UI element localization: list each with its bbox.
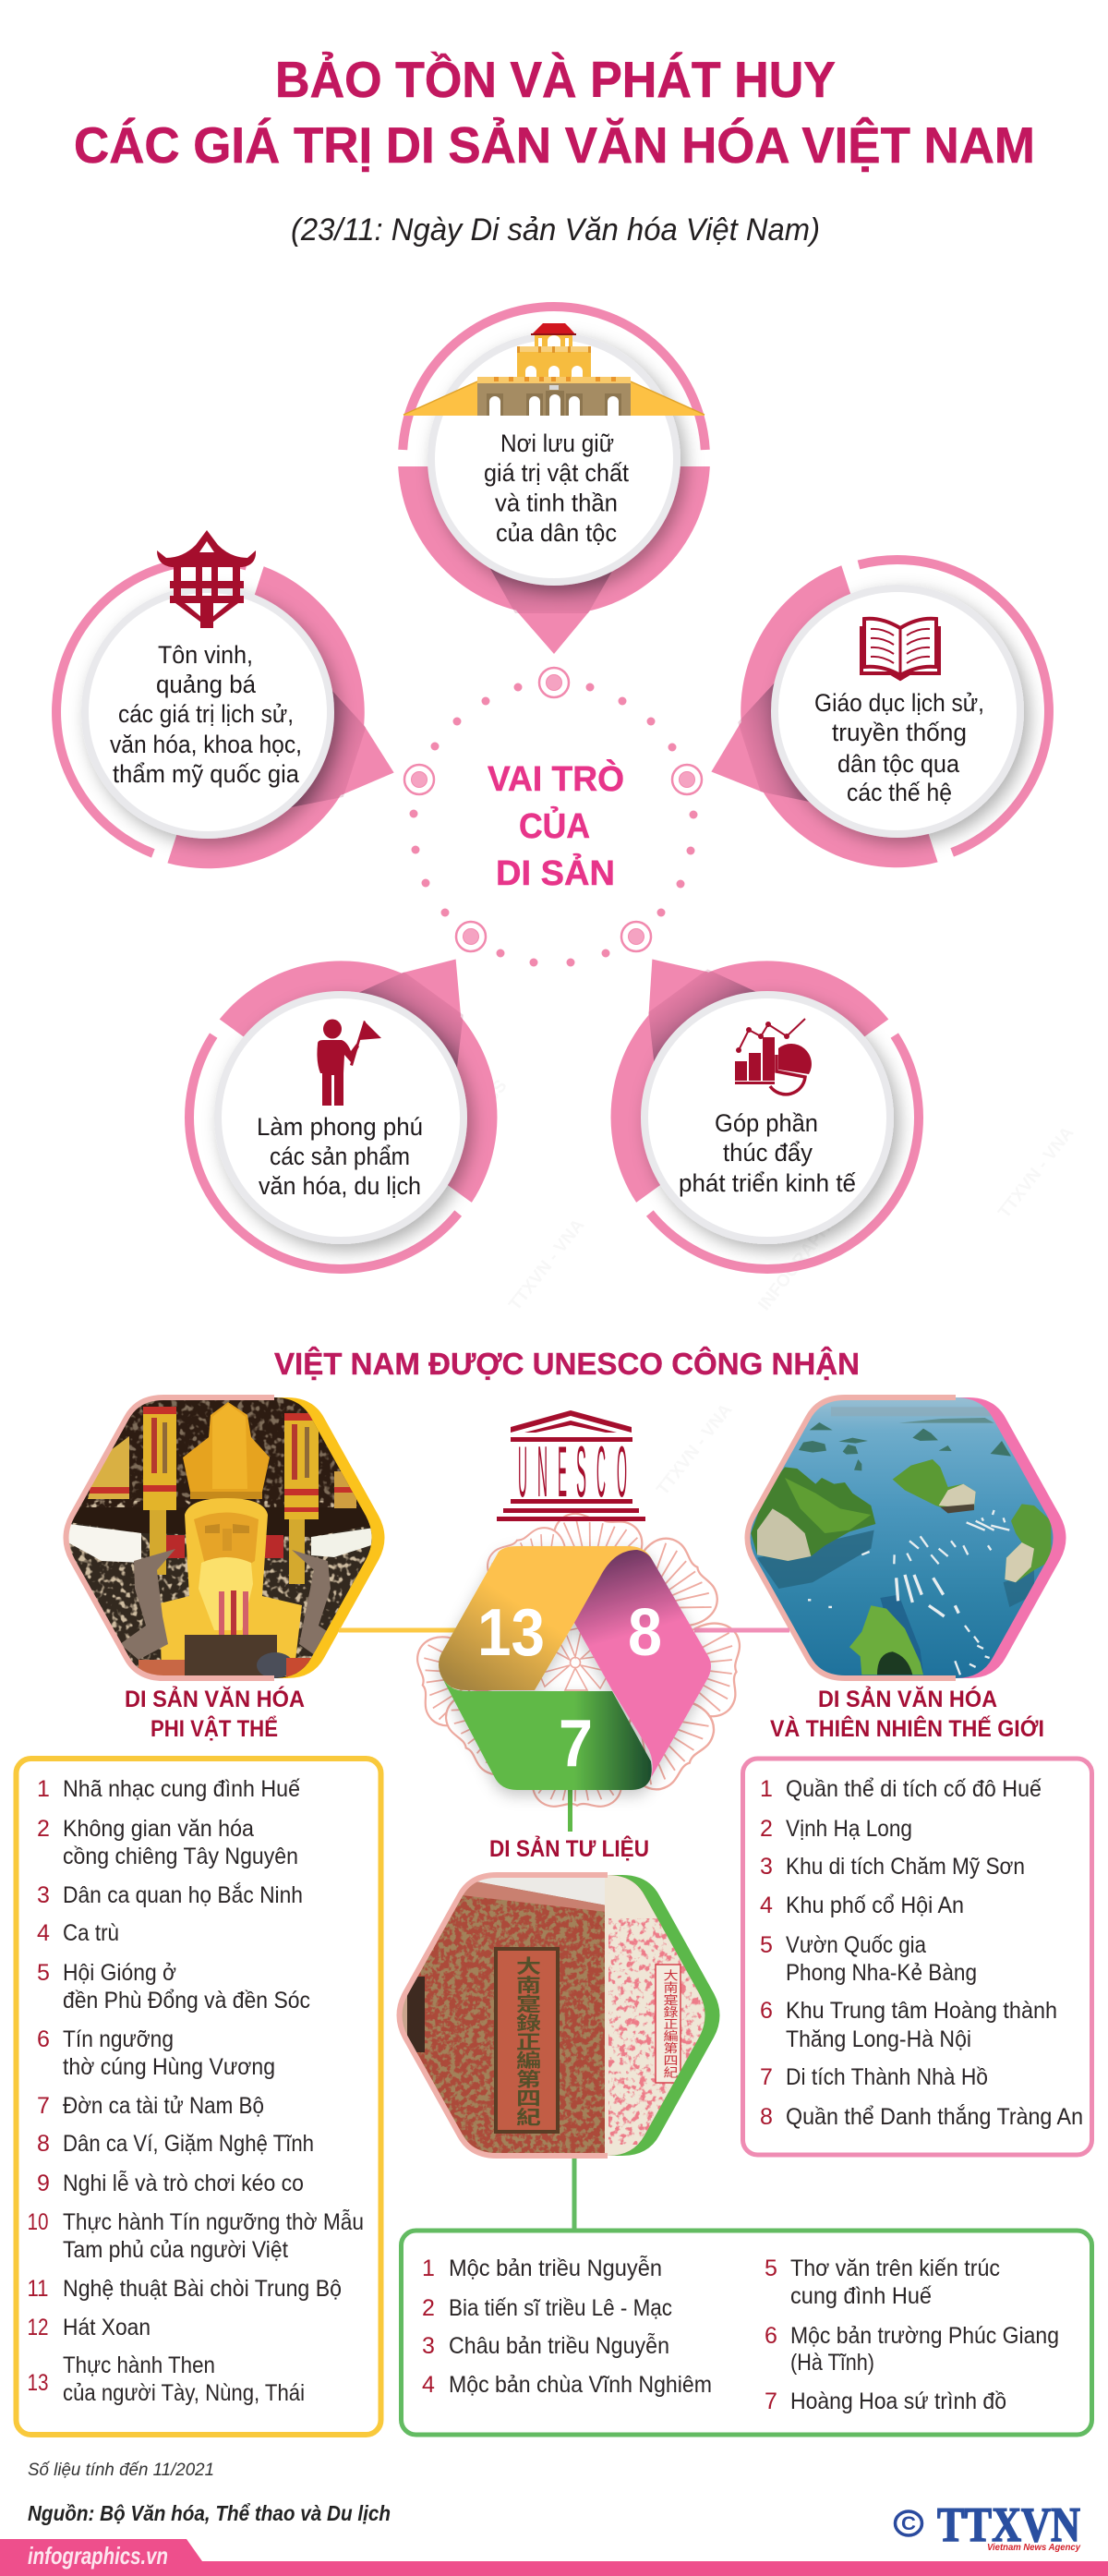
connector: green upper [568, 1783, 572, 1832]
icon: person with flag [317, 1020, 381, 1106]
text: role 2: văn hóa, khoa học, [110, 731, 302, 758]
text: TTXVN - VNA [505, 1215, 589, 1314]
panel: world heritage list: Quần thể Danh thắng Tràng An [786, 2103, 1083, 2130]
panel: intangible heritage list: của người Tày, Nùng, Thái [63, 2380, 305, 2406]
text: role 2: thẩm mỹ quốc gia [113, 760, 300, 788]
label: documentary heritage: DI SẢN TƯ LIỆU [489, 1834, 649, 1862]
text: role 3: truyền thống [832, 719, 967, 746]
text: role 4: văn hóa, du lịch [259, 1172, 421, 1200]
panel: intangible heritage list: Dân ca quan họ Bắc Ninh [63, 1881, 303, 1908]
panel: world heritage list: Khu di tích Chăm Mỹ Sơn [786, 1854, 1025, 1880]
panel: intangible heritage list: Tín ngưỡng [63, 2026, 174, 2052]
photo: woodblock hexagon [392, 1870, 720, 2161]
panel: intangible heritage list: Không gian văn hóa [63, 1816, 254, 1842]
band: pink 8: 8 [628, 1596, 662, 1670]
band: green 7 [440, 1675, 652, 1790]
icon: UNESCO logo: N [537, 1431, 548, 1512]
panel: documentary heritage list: 2 [422, 2295, 435, 2321]
text: TTXVN - VNA [994, 1123, 1078, 1222]
panel: world heritage list: Vịnh Hạ Long [786, 1816, 912, 1842]
panel: world heritage list: Thăng Long-Hà Nội [786, 2026, 971, 2052]
panel: intangible heritage list: Thực hành Then [63, 2352, 215, 2378]
panel: world heritage list: Khu phố cổ Hội An [786, 1893, 964, 1918]
panel: documentary heritage list: Mộc bản triều Nguyễn [449, 2255, 662, 2281]
panel: documentary heritage list: (Hà Tĩnh) [790, 2350, 874, 2376]
panel: world heritage list: Khu Trung tâm Hoàng thành [786, 1998, 1057, 2024]
panel: intangible heritage list: 10 [28, 2209, 48, 2235]
title: CÁC GIÁ TRỊ DI SẢN VĂN HÓA VIỆT NAM [74, 116, 1035, 174]
icon: one pillar pagoda [157, 530, 256, 628]
panel: intangible heritage list: Dân ca Ví, Giặm Nghệ Tĩnh [63, 2131, 314, 2157]
panel: intangible heritage list: Tam phủ của người Việt [63, 2237, 288, 2263]
label: world heritage: DI SẢN VĂN HÓA [818, 1685, 997, 1712]
panel: intangible heritage list: 12 [28, 2315, 48, 2340]
centre heading: VAI TRÒ [488, 758, 624, 799]
panel: world heritage list: 4 [760, 1893, 773, 1918]
text: role 3 [814, 689, 984, 806]
panel: role 4 bottom-left circle [126, 867, 582, 1332]
panel: documentary heritage list: 7 [765, 2389, 777, 2414]
photo: woodblock hexagon: 大南寔錄正編第四紀 [661, 1969, 678, 2078]
panel: intangible heritage list: 9 [37, 2171, 50, 2196]
icon: UNESCO logo: U [518, 1431, 527, 1512]
logo: TTXVN [896, 2498, 1080, 2553]
centre heading: DI SẢN [496, 853, 615, 893]
panel: world heritage list: 3 [760, 1854, 773, 1880]
icon: UNESCO logo: S [576, 1431, 586, 1512]
band: yellow 13: 13 [477, 1596, 545, 1670]
panel: intangible heritage list: 1 [37, 1776, 50, 1802]
panel: intangible heritage list: 6 [37, 2026, 50, 2052]
label: intangible heritage [125, 1685, 305, 1742]
band: pink 8 [574, 1550, 711, 1778]
panel: documentary heritage list: cung đình Huế [790, 2283, 932, 2309]
panel: intangible heritage list: Nghi lễ và trò chơi kéo co [63, 2170, 304, 2196]
logo: TTXVN: TTXVN [937, 2498, 1080, 2552]
panel: documentary heritage list: Mộc bản trường Phúc Giang [790, 2323, 1059, 2349]
source: Nguồn: Bộ Văn hóa, Thể thao và Du lịch [28, 2501, 391, 2525]
text: role 2: các giá trị lịch sử, [118, 700, 294, 728]
dotted ring around centre [404, 668, 702, 966]
panel: intangible heritage list: Ca trù [63, 1920, 119, 1946]
panel: world heritage list: 8 [760, 2104, 773, 2130]
chart: three-part ribbon [439, 1546, 711, 1790]
panel: world heritage list: 6 [760, 1998, 773, 2024]
icon: chart growth [735, 1019, 812, 1094]
centre heading: CỦA [519, 805, 590, 846]
panel: world heritage list: 2 [760, 1816, 773, 1842]
text: INFOGRAPHICS [754, 1196, 853, 1314]
text: role 1: của dân tộc [496, 519, 617, 547]
title [74, 51, 1035, 174]
panel: world heritage list: Quần thể di tích cố đô Huế [786, 1776, 1042, 1802]
panel: intangible heritage list: 8 [37, 2131, 50, 2157]
text: role 5: Góp phần [715, 1109, 818, 1137]
panel: documentary heritage list: 5 [765, 2256, 777, 2281]
label: world heritage [770, 1685, 1044, 1742]
band: yellow 13 [439, 1546, 653, 1690]
text: role 3: các thế hệ [847, 779, 952, 806]
panel: documentary heritage list: 4 [422, 2372, 435, 2398]
text: role 1: Nơi lưu giữ [500, 429, 614, 457]
panel: world heritage list: Di tích Thành Nhà Hồ [786, 2064, 988, 2090]
panel: documentary heritage list: 6 [765, 2323, 777, 2349]
text: INFOGRAPHICS [413, 1076, 512, 1194]
photo: woodblock hexagon: 大南寔錄正編第四紀 [512, 1956, 541, 2126]
text: role 4: các sản phẩm [270, 1143, 410, 1170]
panel: world heritage list: 1 [760, 1776, 773, 1802]
panel: intangible heritage list: 3 [37, 1882, 50, 1908]
panel: documentary heritage list: Châu bản triều Nguyễn [449, 2332, 669, 2359]
panel: world heritage list: Phong Nha-Kẻ Bàng [786, 1960, 977, 1986]
panel: documentary heritage list: Mộc bản chùa Vĩnh Nghiêm [449, 2372, 712, 2398]
panel: documentary heritage list [401, 2231, 1091, 2435]
section heading: VIỆT NAM ĐƯỢC UNESCO CÔNG NHẬN [274, 1346, 860, 1381]
panel: intangible heritage list: 5 [37, 1960, 50, 1986]
panel: world heritage list: 5 [760, 1932, 773, 1958]
panel: documentary heritage list: Thơ văn trên kiến trúc [790, 2256, 1000, 2281]
icon: UNESCO logo: O [617, 1431, 627, 1512]
panel: intangible heritage list: Nhã nhạc cung đình Huế [63, 1776, 300, 1802]
panel: intangible heritage list: thờ cúng Hùng Vương [63, 2054, 275, 2080]
panel: intangible heritage list: Đờn ca tài tử Nam Bộ [63, 2093, 264, 2119]
panel: intangible heritage list: 2 [37, 1816, 50, 1842]
text: role 2: Tôn vinh, [158, 641, 253, 669]
panel: intangible heritage list: 4 [37, 1920, 50, 1946]
photo: statue hexagon [55, 1385, 388, 1690]
panel: documentary heritage list: Bia tiến sĩ triều Lê - Mạc [449, 2295, 672, 2321]
photo: Ha Long Bay hexagon [739, 1385, 1066, 1690]
footer band [0, 2539, 1108, 2576]
panel: intangible heritage list: 13 [28, 2370, 48, 2396]
icon: open book [861, 619, 939, 679]
band: green 7: 7 [559, 1707, 593, 1781]
label: intangible heritage: PHI VẬT THỂ [151, 1714, 278, 1742]
panel: intangible heritage list: 7 [37, 2093, 50, 2119]
text: role 4 [257, 1113, 423, 1200]
panel: intangible heritage list: Hội Gióng ở [63, 1960, 176, 1986]
subtitle: (23/11: Ngày Di sản Văn hóa Việt Nam) [291, 212, 820, 248]
panel: documentary heritage list: Hoàng Hoa sứ trình đồ [790, 2389, 1006, 2414]
text: role 5: thúc đẩy [723, 1139, 813, 1167]
note: data date: Số liệu tính đến 11/2021 [28, 2461, 214, 2480]
panel: intangible heritage list: Nghệ thuật Bài chòi Trung Bộ [63, 2276, 342, 2302]
panel: intangible heritage list: 11 [28, 2276, 48, 2302]
panel: intangible heritage list: Hát Xoan [63, 2315, 151, 2340]
text: role 3: dân tộc qua [837, 750, 960, 778]
text: TTXVN - VNA [653, 1400, 737, 1499]
panel: role 5 bottom-right circle [526, 867, 982, 1332]
panel: role 2 left circle [16, 517, 442, 921]
panel: role 3 right circle [663, 516, 1090, 920]
logo: TTXVN: C [901, 2513, 916, 2534]
label: intangible heritage: DI SẢN VĂN HÓA [125, 1685, 305, 1712]
text: role 2: quảng bá [156, 671, 257, 698]
text: role 5 [679, 1109, 856, 1197]
panel: intangible heritage list: đền Phù Đổng và đền Sóc [63, 1988, 310, 2014]
text: role 5: phát triển kinh tế [679, 1169, 856, 1197]
panel: world heritage list: 7 [760, 2064, 773, 2090]
panel: intangible heritage list [17, 1759, 380, 2435]
connector: pink [694, 1627, 789, 1633]
panel: world heritage list [742, 1759, 1091, 2155]
text: role 2 [110, 641, 302, 788]
text: role 3: Giáo dục lịch sử, [814, 689, 984, 717]
footer band: infographics.vn [28, 2542, 168, 2570]
panel: world heritage list: Vườn Quốc gia [786, 1932, 926, 1958]
panel: documentary heritage list: 1 [422, 2256, 435, 2281]
icon: citadel flag tower [403, 323, 705, 416]
icon: UNESCO logo: E [558, 1431, 567, 1512]
decoration: flower behind the ribbon [414, 1510, 741, 1807]
text: role 1: và tinh thần [495, 490, 618, 517]
label: world heritage: VÀ THIÊN NHIÊN THẾ GIỚI [770, 1714, 1044, 1742]
panel: intangible heritage list: cồng chiêng Tây Nguyên [63, 1844, 298, 1869]
text: role 1: giá trị vật chất [484, 459, 629, 487]
text: role 1 [484, 429, 629, 547]
connector: green lower [572, 2156, 576, 2230]
connector: yellow [339, 1627, 457, 1633]
panel: documentary heritage list: 3 [422, 2333, 435, 2359]
icon: UNESCO logo [497, 1410, 645, 1521]
logo: TTXVN: Vietnam News Agency [987, 2543, 1080, 2553]
panel: role 1 top circle [398, 307, 710, 654]
title: BẢO TỒN VÀ PHÁT HUY [275, 51, 836, 108]
centre heading [488, 758, 624, 893]
panel: intangible heritage list: Thực hành Tín ngưỡng thờ Mẫu [63, 2208, 364, 2235]
text: role 4: Làm phong phú [257, 1113, 423, 1141]
icon: UNESCO logo: C [596, 1431, 606, 1512]
